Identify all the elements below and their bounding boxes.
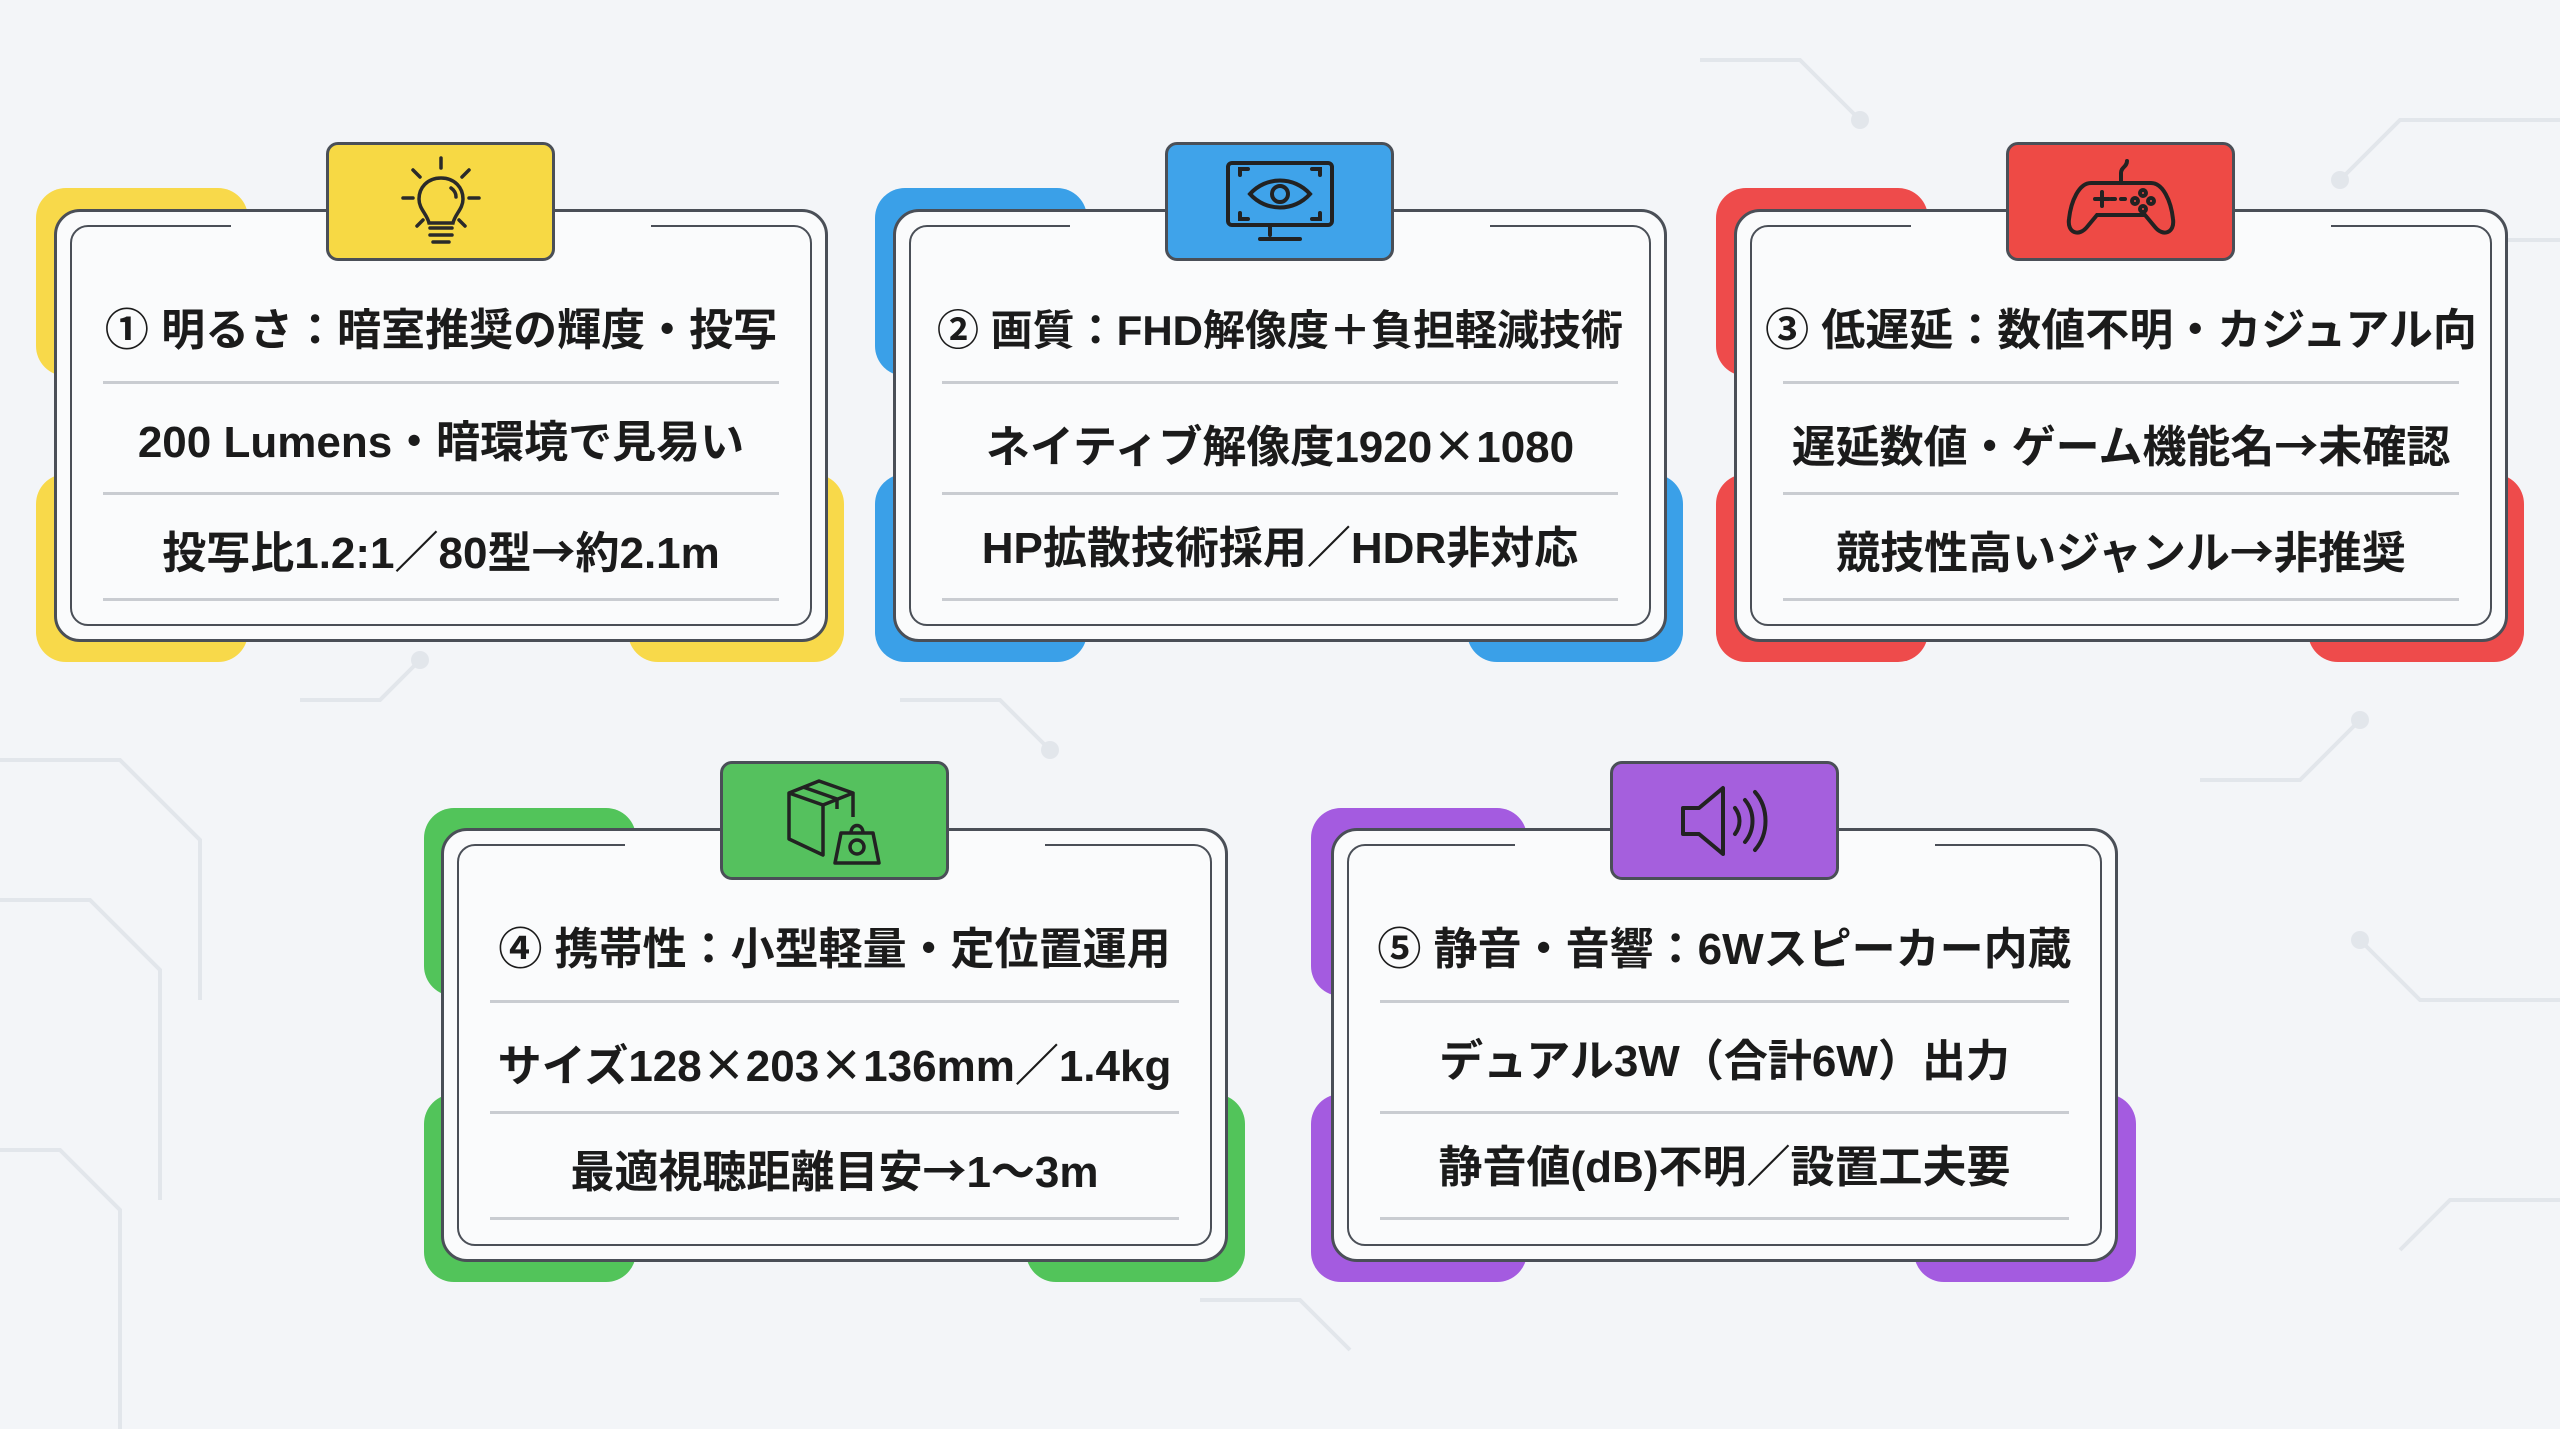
icon: light bulb: [326, 142, 555, 261]
heading: ⑤ 静音・音響：6Wスピーカー内蔵: [1377, 925, 2072, 974]
text: throw ratio: 投写比1.2:1／80型→約2.1m: [162, 517, 720, 581]
accent corners: [424, 761, 1245, 1282]
text: HDR: HP拡散技術採用／HDR非対応: [982, 524, 1578, 573]
icon: monitor eye: [1165, 142, 1394, 261]
icon: box and weight: [720, 761, 948, 880]
panel: brightness: [36, 142, 844, 662]
text: noise: 静音値(dB)不明／設置工夫要: [1439, 1143, 2010, 1192]
heading: ① 明るさ：暗室推奨の輝度・投写: [105, 306, 777, 355]
heading: ② 画質：FHD解像度＋負担軽減技術: [937, 307, 1623, 354]
accent corners: [1311, 761, 2136, 1282]
text: size: サイズ128×203×136mm／1.4kg: [498, 1030, 1171, 1094]
panel: latency: [1716, 142, 2524, 662]
accent corners: [1716, 184, 2524, 662]
icon: game controller: [2006, 142, 2235, 261]
panel: portability: [424, 761, 1245, 1282]
text: latency value: 遅延数値・ゲーム機能名→未確認: [1792, 411, 2450, 475]
text: genre: 競技性高いジャンル→非推奨: [1836, 517, 2406, 581]
text: viewing distance: 最適視聴距離目安→1～3m: [570, 1136, 1099, 1200]
panel: picture quality: [875, 142, 1683, 662]
accent corners: [36, 176, 2500, 662]
text: lumens: 200 Lumens・暗環境で見易い: [138, 418, 744, 467]
panel: sound: [1311, 761, 2136, 1282]
text: resolution: ネイティブ解像度1920×1080: [986, 411, 1574, 475]
heading: ③ 低遅延：数値不明・カジュアル向: [1765, 306, 2477, 355]
icon: speaker: [1610, 761, 1838, 880]
accent corners: [875, 178, 2500, 662]
heading: ④ 携帯性：小型軽量・定位置運用: [498, 925, 1171, 974]
text: output: デュアル3W（合計6W）出力: [1439, 1037, 2010, 1086]
